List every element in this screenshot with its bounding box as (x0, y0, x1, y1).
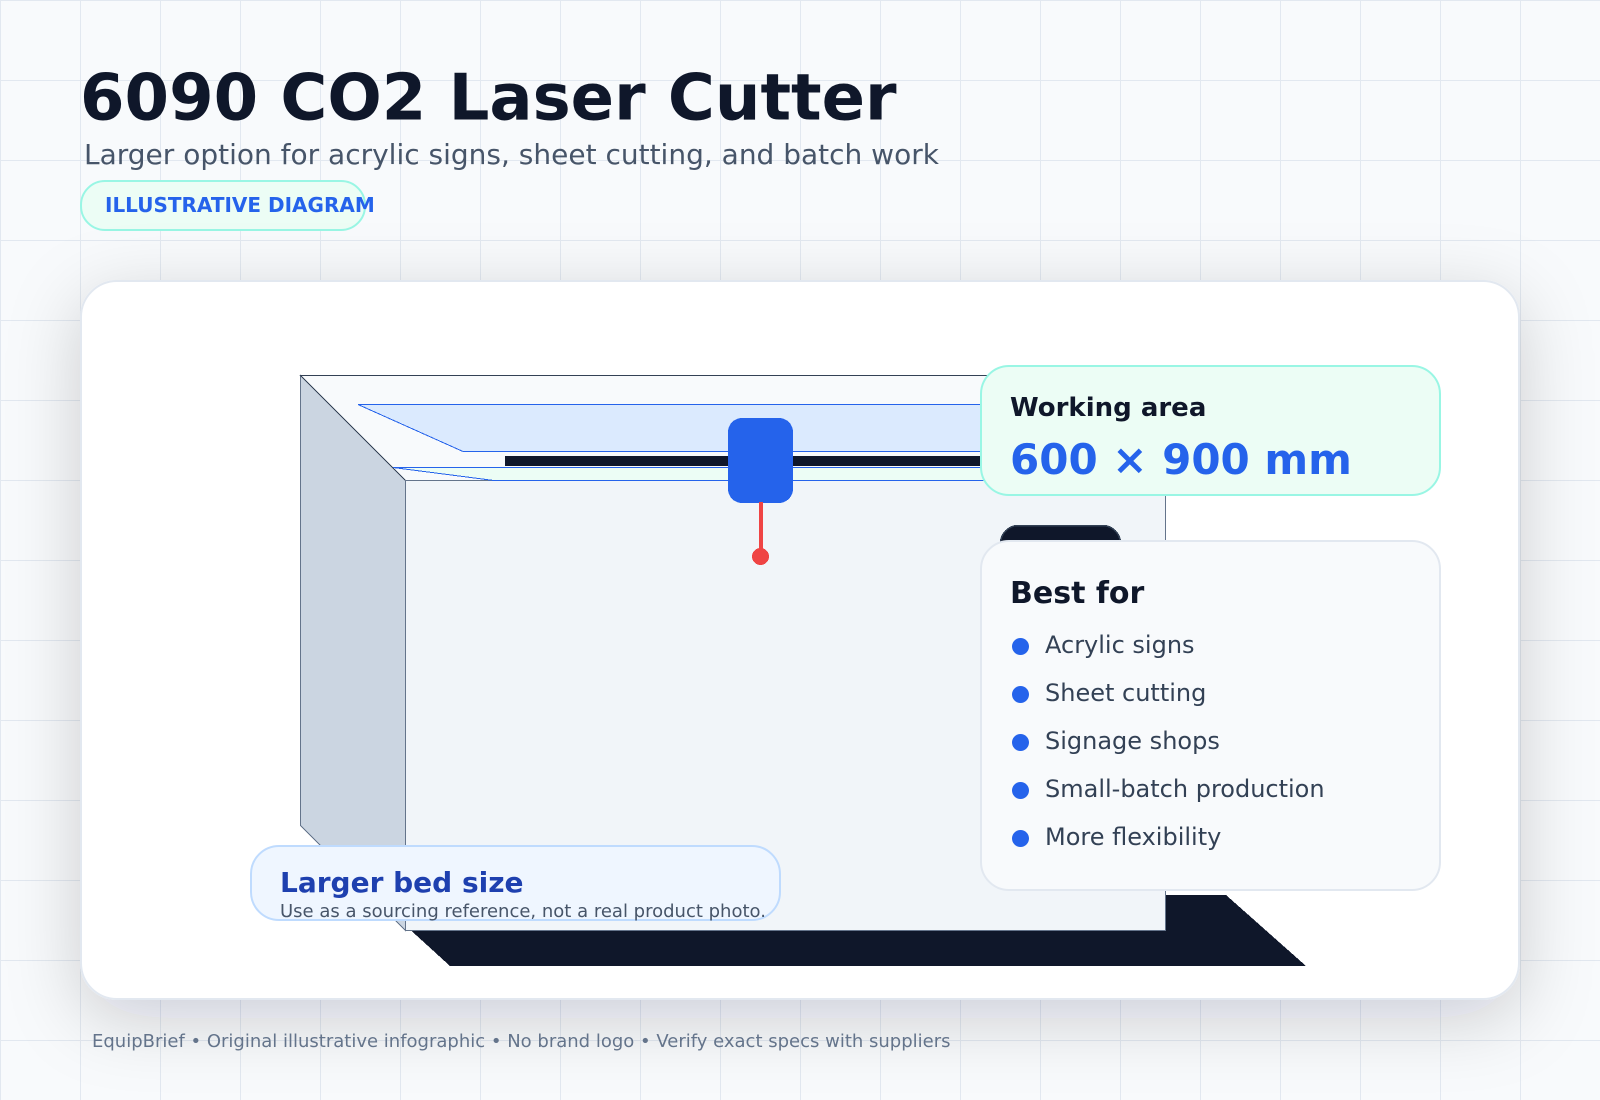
work bed (358, 404, 1100, 452)
laser beam (759, 502, 763, 556)
illustration: laser cutter machine (300, 376, 1306, 966)
callout: working area (981, 366, 1440, 495)
laser head (728, 418, 793, 503)
panel: main card (81, 281, 1519, 999)
callout: larger bed size (251, 846, 780, 922)
heading: best for: Best for (1010, 576, 1145, 611)
callout: larger bed size: Larger bed size (280, 866, 524, 899)
callout: working area: 600 × 900 mm (1010, 435, 1352, 484)
machine base shadow (405, 895, 1306, 966)
list item: acrylic signs: Acrylic signs (1045, 631, 1195, 659)
badge: illustrative diagram (81, 181, 375, 230)
callout: working area: Working area (1010, 393, 1206, 423)
machine top face (300, 376, 1165, 480)
machine front face (406, 480, 1166, 930)
gantry rail (505, 456, 1065, 466)
badge: illustrative diagram: ILLUSTRATIVE DIAGRAM (105, 193, 375, 217)
list item: more flexibility: More flexibility (1045, 823, 1221, 851)
title: 6090 CO2 Laser Cutter (80, 62, 897, 136)
material sheet (393, 468, 1100, 480)
list item: sheet cutting: Sheet cutting (1045, 679, 1206, 707)
machine left face (300, 376, 406, 930)
footer: EquipBrief • Original illustrative infographic • No brand logo • Verify exact specs with suppliers (92, 1031, 951, 1052)
list item: signage shops: Signage shops (1045, 727, 1220, 755)
subtitle: Larger option for acrylic signs, sheet cutting, and batch work (84, 138, 940, 171)
laser point (752, 548, 769, 565)
panel: best for (981, 541, 1440, 890)
callout: larger bed size: Use as a sourcing reference, not a real product photo. (280, 901, 766, 922)
control panel (1000, 526, 1120, 586)
list item: small-batch production: Small-batch production (1045, 775, 1325, 803)
